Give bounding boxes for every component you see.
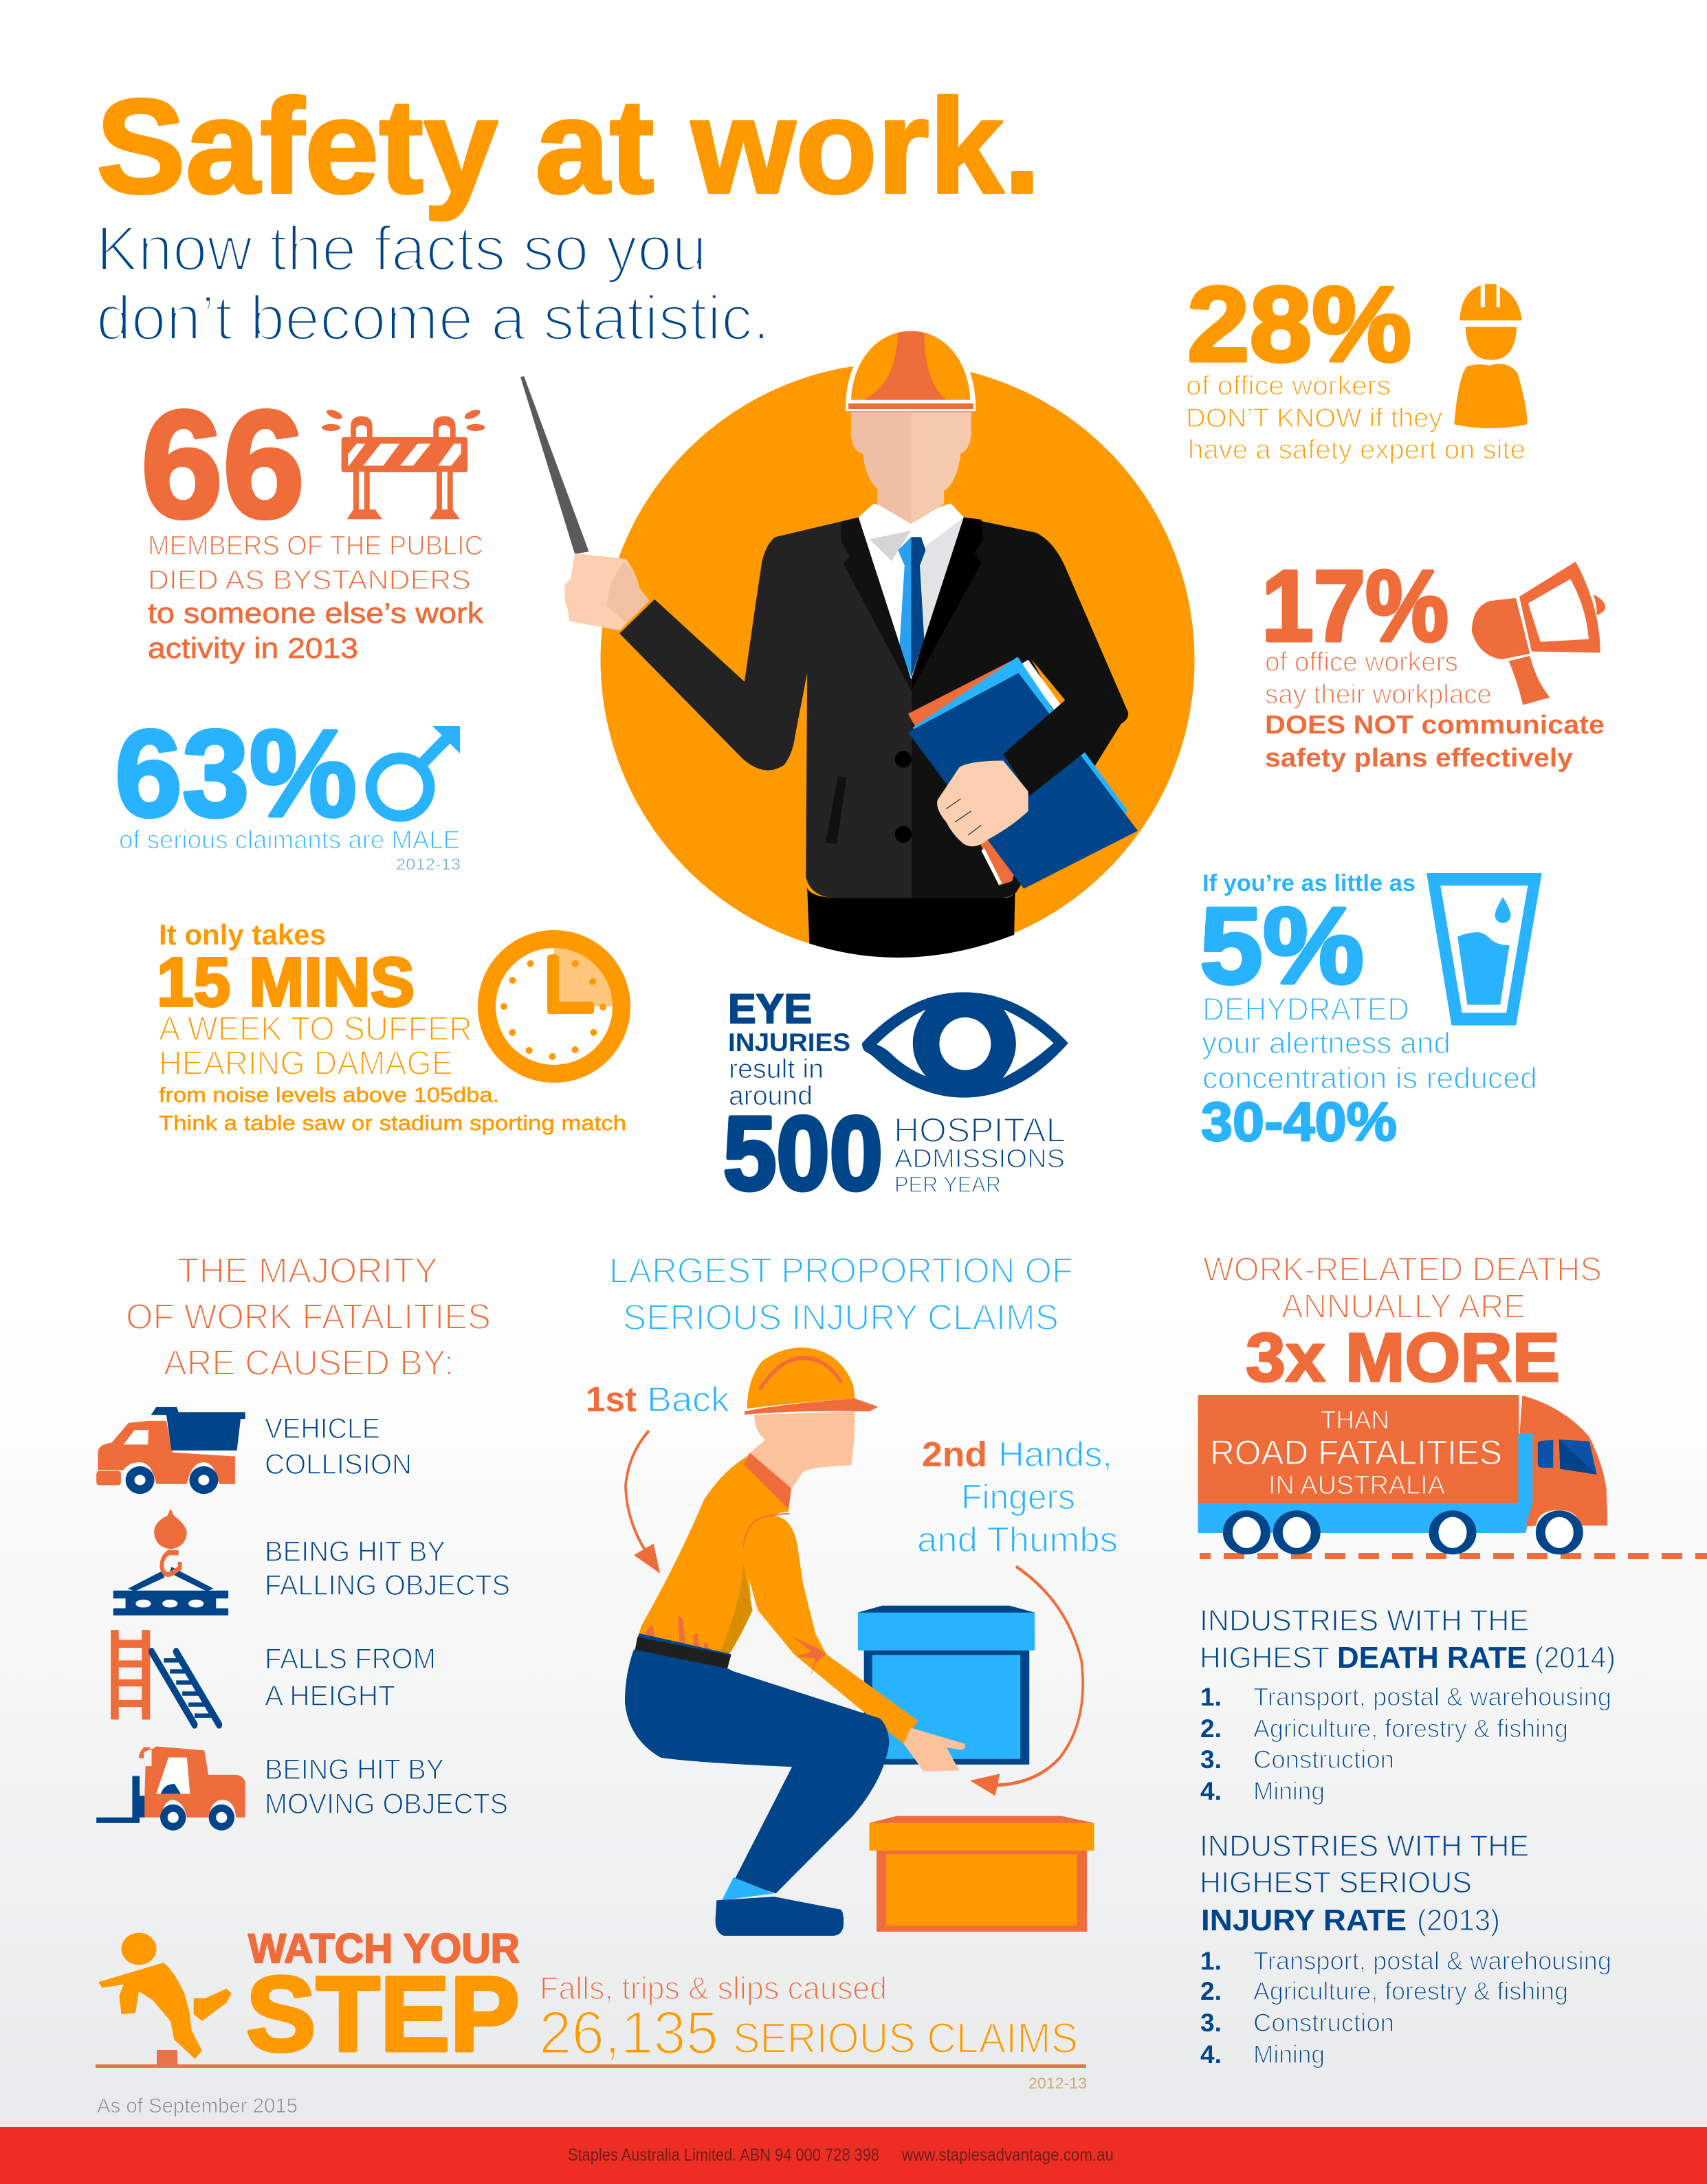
list: highest serious injury rate — [1200, 1829, 1611, 2069]
truck text: ROAD FATALITIES — [1210, 1433, 1502, 1472]
list: highest serious injury rate: (2013) — [1417, 1904, 1500, 1937]
list: highest death rate: DEATH RATE — [1337, 1641, 1527, 1675]
truck text — [1210, 1406, 1502, 1500]
list: highest serious injury rate: Agriculture, forestry & fishing — [1253, 1977, 1568, 2005]
label: 2nd hands, fingers and thumbs: Fingers — [961, 1477, 1075, 1516]
list: highest death rate: HIGHEST — [1200, 1641, 1330, 1675]
label: 2nd hands, fingers and thumbs — [917, 1435, 1118, 1559]
text: falling objects: BEING HIT BY — [265, 1535, 445, 1567]
stat: eye injuries: around — [729, 1081, 813, 1111]
arrow: to hands — [970, 1567, 1083, 1796]
list: highest serious injury rate: 1. — [1200, 1947, 1222, 1975]
text: falls from a height: FALLS FROM — [265, 1642, 436, 1675]
stat: 5% dehydrated: 5% — [1200, 885, 1364, 1006]
label: 2nd hands, fingers and thumbs: 2nd — [922, 1435, 987, 1474]
text: members of the public: to someone else’s work — [148, 597, 484, 629]
heading: majority of fatalities: ARE CAUSED BY: — [164, 1343, 454, 1383]
stat: 5% dehydrated: DEHYDRATED — [1202, 991, 1409, 1027]
stat: eye injuries: result in — [729, 1055, 824, 1084]
text: members of the public: activity in 2013 — [148, 632, 358, 664]
list: highest serious injury rate: 4. — [1200, 2040, 1222, 2069]
heading: majority of fatalities: OF WORK FATALITIES — [126, 1297, 491, 1337]
stat: 17% communication — [1262, 550, 1605, 773]
text: vehicle collision: COLLISION — [265, 1448, 412, 1480]
panel: serious injury claims — [586, 1251, 1118, 1936]
panel: watch your step — [96, 1926, 1087, 2092]
icon: forklift — [96, 1746, 245, 1831]
stat: 17% communication: 17% — [1262, 550, 1449, 663]
list: highest death rate: 1. — [1200, 1683, 1222, 1711]
stat: 28% safety expert: have a safety expert on site — [1188, 435, 1526, 465]
stat: 28% safety expert: DON’T KNOW if they — [1186, 404, 1443, 433]
panel: watch your step: SERIOUS CLAIMS — [733, 2015, 1078, 2062]
text: falls from a height — [265, 1642, 436, 1712]
stat: eye injuries: PER YEAR — [894, 1172, 1001, 1197]
subtitle: don’t become a statistic. — [96, 283, 770, 353]
panel: watch your step: STEP — [246, 1954, 520, 2073]
stat: eye injuries: INJURIES — [728, 1028, 850, 1057]
stat: 63% male: of serious claimants are MALE — [119, 826, 460, 854]
label: 2nd hands, fingers and thumbs: Hands, — [998, 1435, 1112, 1474]
text: falling objects: FALLING OBJECTS — [265, 1569, 510, 1601]
panel: work-related deaths truck: ANNUALLY ARE — [1281, 1288, 1526, 1325]
stat: 63% male — [115, 705, 461, 873]
stat: 17% communication: DOES NOT communicate — [1265, 711, 1605, 740]
icon: megaphone — [1472, 562, 1605, 705]
stat: 15 mins hearing damage: 15 MINS — [157, 944, 415, 1021]
title: Safety at work. — [96, 71, 1041, 221]
heading: majority of fatalities — [126, 1251, 491, 1383]
text: members of the public — [148, 531, 484, 664]
truck text: THAN — [1321, 1406, 1389, 1434]
stat: 63% male: 63% — [115, 705, 357, 843]
icon: truck — [1198, 1395, 1607, 1552]
label: 1st back: 1st — [586, 1380, 637, 1419]
heading: largest proportion — [609, 1251, 1073, 1338]
stat: 28% safety expert — [1186, 265, 1527, 465]
list: highest death rate: INDUSTRIES WITH THE — [1200, 1604, 1529, 1637]
list: highest death rate: Agriculture, forestry & fishing — [1253, 1714, 1568, 1743]
list: highest serious injury rate: Mining — [1253, 2040, 1325, 2069]
list: highest death rate — [1200, 1604, 1616, 1805]
presenter figure — [520, 325, 1138, 958]
icon: eye — [862, 992, 1068, 1098]
text: moving objects: MOVING OBJECTS — [265, 1787, 508, 1820]
icon: male symbol — [371, 726, 460, 816]
list: highest death rate: Construction — [1253, 1745, 1394, 1774]
panel: work-related deaths truck — [1198, 1251, 1707, 1556]
subtitle: Know the facts so you — [96, 214, 707, 284]
panel: watch your step: 26,135 — [539, 1998, 718, 2066]
stat: 15 mins hearing damage: HEARING DAMAGE — [159, 1045, 453, 1082]
stat: 5% dehydrated: your alertness and — [1202, 1026, 1451, 1060]
stat: 5% dehydrated: concentration is reduced — [1202, 1061, 1537, 1095]
icon: clock — [487, 939, 621, 1074]
text: moving objects: BEING HIT BY — [265, 1753, 444, 1785]
stat: 17% communication: safety plans effectively — [1265, 744, 1573, 773]
icon: tripping figure — [98, 1933, 232, 2059]
stat: eye injuries: ADMISSIONS — [894, 1145, 1065, 1173]
footer bar: www.staplesadvantage.com.au — [901, 2146, 1114, 2165]
text: vehicle collision: VEHICLE — [265, 1412, 380, 1444]
footer bar: Staples Australia Limited. ABN 94 000 728 398 — [568, 2146, 879, 2165]
stat: 28% safety expert: of office workers — [1186, 371, 1391, 401]
stat: 66 bystanders: 66 — [141, 379, 305, 550]
icon: crane hook with beam — [113, 1508, 228, 1615]
road dashes — [1200, 1553, 1707, 1559]
step block and ground line — [96, 2050, 1086, 2068]
note: as of date: As of September 2015 — [97, 2095, 298, 2117]
text: falls from a height: A HEIGHT — [265, 1679, 395, 1712]
stat: 5% dehydrated: If you’re as little as — [1202, 870, 1416, 896]
label: 1st back — [586, 1380, 730, 1419]
list: highest death rate: (2014) — [1534, 1641, 1616, 1675]
stat: 63% male: 2012-13 — [396, 855, 461, 873]
list: highest death rate: Mining — [1253, 1777, 1325, 1805]
text: vehicle collision — [265, 1412, 412, 1480]
stat: 15 mins hearing damage: from noise levels above 105dba. — [159, 1083, 499, 1107]
footer bar — [0, 2127, 1707, 2184]
list: highest serious injury rate: Transport, postal & warehousing — [1253, 1947, 1611, 1975]
text: falling objects — [265, 1535, 510, 1601]
text: members of the public: MEMBERS OF THE PUBLIC — [148, 531, 483, 561]
list: highest serious injury rate: 2. — [1200, 1977, 1222, 2005]
illustration: worker lifting box — [625, 1347, 1094, 1936]
stat: 5% dehydrated — [1200, 870, 1542, 1152]
label: 2nd hands, fingers and thumbs: and Thumbs — [917, 1520, 1118, 1559]
stat: 15 mins hearing damage — [157, 918, 626, 1135]
list: highest death rate: 2. — [1200, 1714, 1222, 1743]
list: highest serious injury rate: INDUSTRIES WITH THE — [1200, 1829, 1529, 1863]
stat: 66 bystanders — [141, 379, 485, 664]
icon: worker with hard hat — [1454, 284, 1527, 428]
stat: eye injuries: HOSPITAL — [894, 1111, 1066, 1149]
text: moving objects — [265, 1753, 508, 1820]
icon: road barrier — [322, 408, 485, 519]
list: highest death rate: 4. — [1200, 1777, 1222, 1805]
heading: largest proportion: SERIOUS INJURY CLAIMS — [623, 1298, 1059, 1338]
heading: largest proportion: LARGEST PROPORTION OF — [609, 1251, 1073, 1291]
panel: watch your step: 2012-13 — [1028, 2075, 1087, 2092]
central figure: orange circle and presenter — [520, 325, 1195, 958]
heading: majority of fatalities: THE MAJORITY — [177, 1251, 438, 1291]
list: highest death rate: Transport, postal & warehousing — [1253, 1683, 1611, 1711]
list: highest serious injury rate: Construction — [1253, 2009, 1394, 2037]
label: 1st back: Back — [647, 1380, 730, 1419]
icon: water glass — [1427, 873, 1542, 1026]
panel: watch your step: Falls, trips & slips caused — [540, 1970, 887, 2006]
stat: 28% safety expert: 28% — [1187, 265, 1411, 384]
stat: 15 mins hearing damage: A WEEK TO SUFFER — [159, 1011, 472, 1048]
subtitle — [96, 214, 770, 353]
stat: eye injuries: EYE — [728, 986, 812, 1032]
icon: dump truck — [96, 1407, 245, 1494]
stat: 5% dehydrated: 30-40% — [1201, 1091, 1397, 1152]
panel: causes of work fatalities — [96, 1251, 510, 1831]
list: highest serious injury rate: 3. — [1200, 2009, 1222, 2037]
panel: watch your step: WATCH YOUR — [248, 1926, 520, 1972]
list: highest death rate: 3. — [1200, 1745, 1222, 1774]
stat: 15 mins hearing damage: Think a table saw or stadium sporting match — [159, 1111, 626, 1135]
stat: 17% communication: of office workers — [1265, 648, 1458, 677]
stat: eye injuries: 500 — [723, 1095, 883, 1212]
text: members of the public: DIED AS BYSTANDERS — [148, 565, 471, 595]
list: highest serious injury rate: HIGHEST SERIOUS — [1200, 1866, 1472, 1899]
stat: eye injuries — [723, 986, 1068, 1212]
truck text: IN AUSTRALIA — [1268, 1471, 1446, 1500]
panel: work-related deaths truck: 3x MORE — [1246, 1319, 1560, 1396]
icon: ladders — [111, 1630, 219, 1725]
panel: work-related deaths truck: WORK-RELATED DEATHS — [1203, 1251, 1602, 1288]
list: highest serious injury rate: INJURY RATE — [1201, 1904, 1407, 1937]
arrow: to back — [626, 1431, 660, 1574]
stat: 15 mins hearing damage: It only takes — [159, 918, 326, 951]
stat: 17% communication: say their workplace — [1265, 680, 1492, 709]
